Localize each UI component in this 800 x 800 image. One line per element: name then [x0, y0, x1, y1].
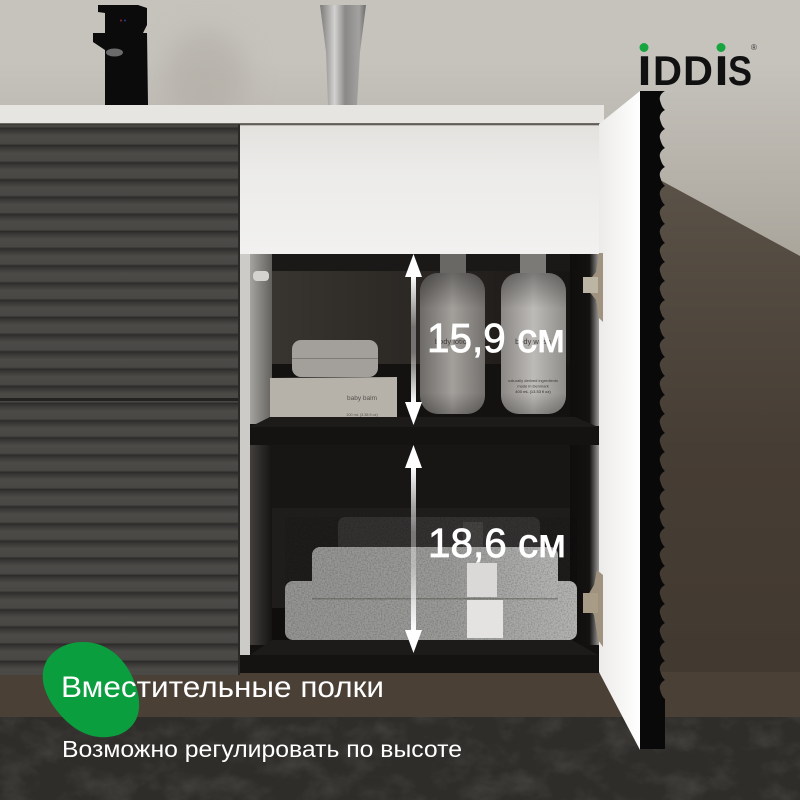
label: 15,9 cm: 15,9 см	[427, 315, 565, 361]
bottle: body lotion	[420, 254, 485, 414]
green blob accent	[43, 642, 139, 737]
bottom shelf	[240, 640, 600, 673]
bottle: body wash: body wash	[515, 337, 551, 346]
scalloped door edge	[640, 91, 665, 749]
open white door	[599, 91, 640, 750]
faucet	[93, 5, 148, 105]
arrow: lower shelf height	[405, 445, 422, 653]
logo: IDDIS: D	[683, 47, 713, 94]
bottle: body wash: 400 mL (13.53 fl oz)	[515, 389, 551, 394]
logo: IDDIS: I	[638, 47, 652, 94]
counter underside line	[0, 123, 604, 125]
upper hinge	[583, 253, 603, 322]
floor band	[0, 672, 800, 717]
bottle: body wash: made in Denmark	[517, 384, 549, 388]
baby balm box: 100 mL (3.38 fl oz)	[346, 413, 378, 417]
subheading: Возможно регулировать по высоте	[62, 736, 462, 762]
logo: IDDIS: D	[653, 47, 682, 94]
marble floor	[0, 717, 800, 800]
arrow: upper shelf height	[405, 254, 422, 425]
faucet shadow on wall	[163, 30, 247, 120]
bottle: body wash: naturally derived ingredients	[508, 378, 558, 383]
open cabinet interior	[240, 254, 600, 673]
baby balm jar	[292, 340, 378, 377]
wall shadow region	[240, 180, 800, 720]
bottle: body lotion: body lotion	[435, 337, 471, 346]
logo: IDDIS	[638, 43, 757, 94]
label: 18,6 cm: 18,6 см	[428, 520, 566, 566]
countertop	[0, 105, 604, 124]
white upper drawer	[240, 126, 600, 254]
logo: IDDIS: I	[714, 47, 728, 94]
baby balm box	[270, 377, 397, 419]
baby balm box: baby balm	[347, 395, 377, 402]
shelf bracket peg	[253, 271, 269, 281]
heading: Вместительные полки	[61, 671, 384, 704]
logo: IDDIS: ®	[751, 43, 757, 52]
left ribbed drawer panel	[0, 124, 240, 675]
logo: IDDIS: S	[728, 47, 752, 94]
stack of towels	[285, 517, 577, 640]
bottle: body wash	[501, 254, 566, 414]
lower hinge	[583, 570, 603, 647]
middle shelf	[250, 417, 599, 445]
cosmetic tube	[320, 5, 366, 105]
